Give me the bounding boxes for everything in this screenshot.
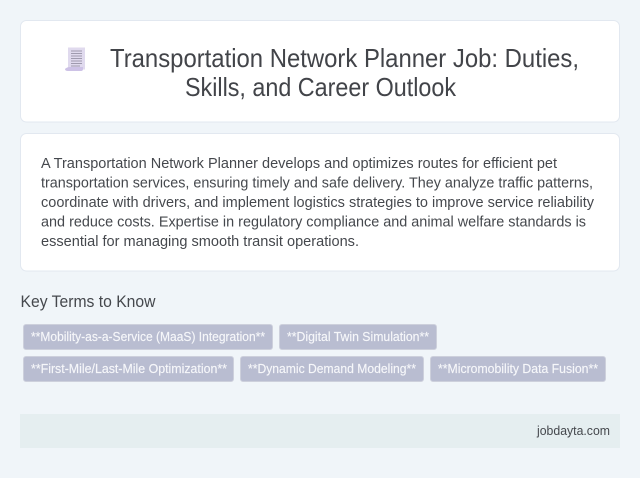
tag: micromobility: **Micromobility Data Fusion**: [438, 361, 598, 376]
tag: first-mile: [24, 356, 234, 382]
title: [110, 45, 579, 102]
tag: MaaS integration: **Mobility-as-a-Service (MaaS) Integration**: [31, 329, 265, 344]
footer bar: [20, 414, 620, 448]
description text: transportation services, ensuring timely and safe delivery. They analyze traffic patterns,: [41, 174, 593, 192]
footer source: jobdayta.com: [536, 423, 610, 438]
tag: digital twin: [280, 324, 436, 350]
description text: A Transportation Network Planner develops and optimizes routes for efficient pet: [41, 155, 558, 172]
panel: description card: [20, 134, 620, 271]
description text: essential for managing smooth transit operations.: [41, 233, 359, 250]
description text: [41, 155, 594, 250]
heading: key terms: Key Terms to Know: [20, 293, 156, 311]
panel: header card: [20, 20, 620, 122]
icon: document scroll: [65, 48, 85, 71]
description text: and reduce costs. Expertise in regulatory compliance and animal welfare standards is: [41, 214, 586, 230]
title: Transportation Network Planner Job: Duties,: [110, 45, 579, 73]
tag: micromobility: [430, 356, 606, 382]
description text: coordinate with drivers, and implement logistics strategies to improve service reliability: [41, 194, 594, 211]
tag: MaaS integration: [24, 324, 272, 350]
tag: digital twin: **Digital Twin Simulation**: [287, 329, 429, 344]
tag: dynamic demand: [240, 356, 424, 382]
tag: first-mile: **First-Mile/Last-Mile Optimization**: [31, 361, 227, 376]
tag: dynamic demand: **Dynamic Demand Modeling**: [248, 361, 416, 376]
title: Skills, and Career Outlook: [185, 74, 456, 102]
